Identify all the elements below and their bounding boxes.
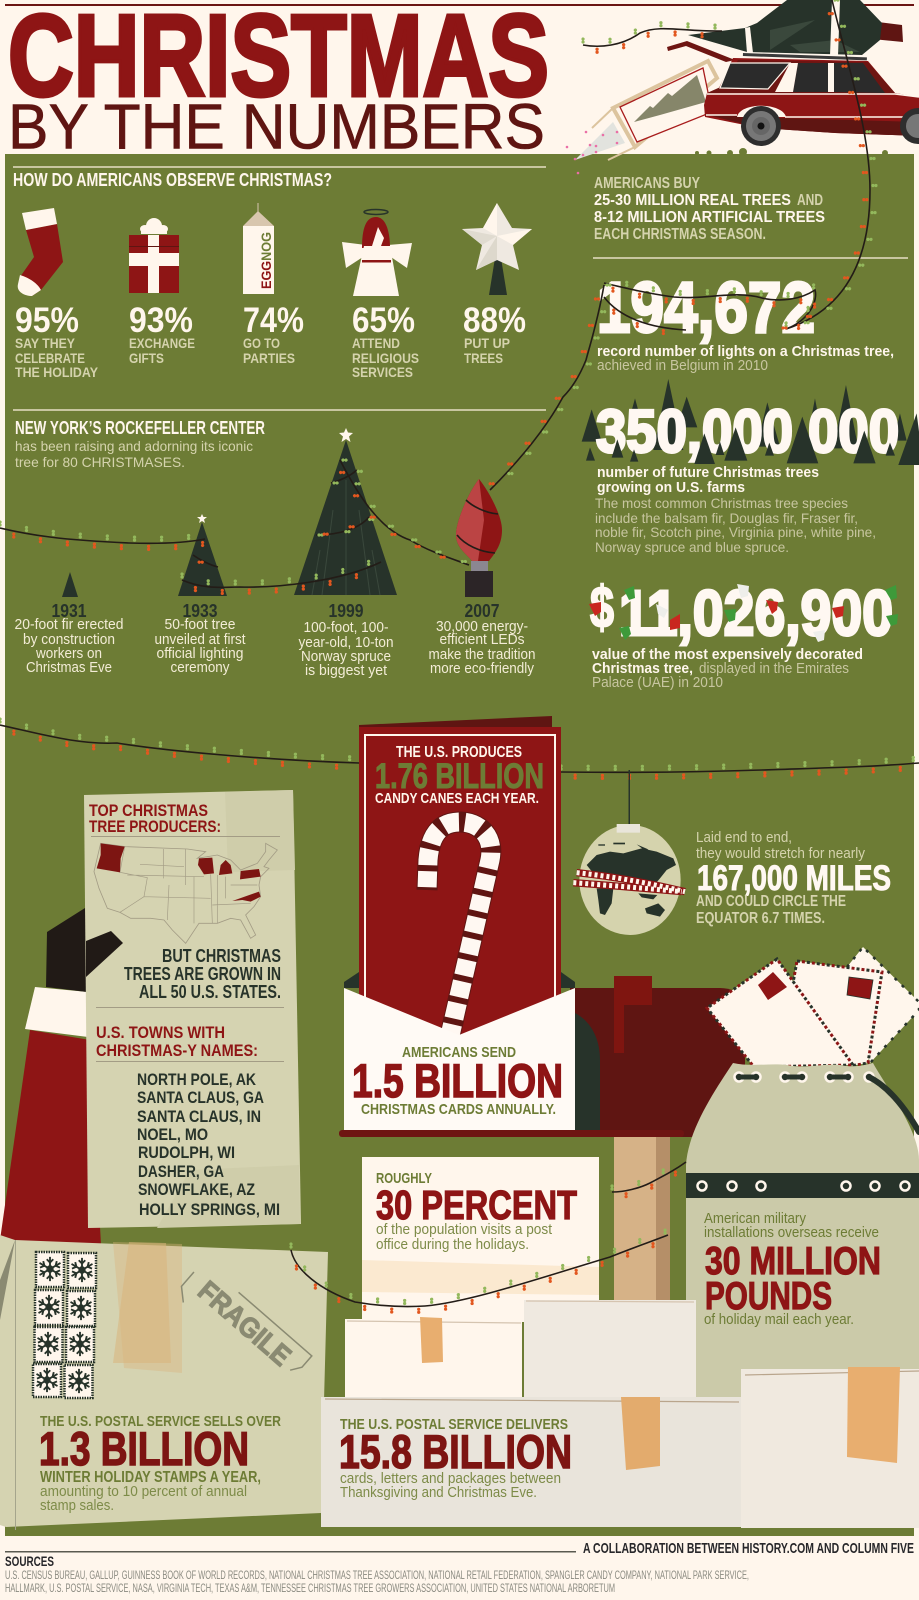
icon: eggnog carton (243, 203, 274, 294)
belt (686, 1173, 919, 1198)
tape (113, 1242, 182, 1373)
timeline: 1931: workers on (35, 646, 102, 662)
envelope (344, 988, 575, 1130)
stat: 93%: 93% (129, 301, 193, 340)
stat: future trees: include the balsam fir, Douglas fir, Fraser fir, (595, 510, 858, 526)
timeline: 1999: Norway spruce (301, 649, 391, 665)
text: candy canes stretch: EQUATOR 6.7 TIMES. (696, 910, 825, 927)
stat: 88%: PUT UP (464, 335, 510, 351)
stat: future trees: noble fir, Scotch pine, Virginia pine, white pine, (595, 524, 876, 540)
icon: eggnog carton: EGGNOG (258, 232, 274, 289)
envelope: 1.5 BILLION (352, 1054, 563, 1107)
timeline: 1931: 20-foot fir erected (14, 617, 124, 633)
icon: mailbox and post (339, 976, 745, 1305)
gems (589, 584, 898, 642)
icon: star tree topper (462, 203, 532, 295)
list: towns (137, 1070, 280, 1219)
section: Rockefeller Center: tree for 80 CHRISTMASES. (15, 454, 185, 470)
icon: car (704, 53, 919, 146)
icon: mail sack: POUNDS (705, 1275, 832, 1318)
stat: future trees (595, 398, 919, 555)
list: towns: HOLLY SPRINGS, MI (139, 1200, 280, 1219)
timeline: 2007 (428, 601, 536, 677)
small box (345, 1317, 522, 1399)
boxes stack (321, 1300, 919, 1528)
footer (5, 1540, 914, 1595)
icon: candy cane (427, 822, 491, 1040)
card: candy canes (344, 716, 575, 1040)
panel: 30 percent: of the population visits a post (376, 1222, 552, 1238)
panel: 30 percent: ROUGHLY (376, 1170, 432, 1187)
string lights: upper (0, 0, 919, 778)
stat: decorated tree value: Palace (UAE) in 2010 (592, 675, 723, 691)
pink sparkles (566, 131, 618, 174)
timeline: 1931: 1931 (52, 601, 86, 621)
timeline: 1999: 100-foot, 100- (304, 620, 389, 636)
icon: 1931 tree (62, 572, 78, 597)
illustration: Santa arm (0, 908, 123, 1245)
timeline: 1933: official lighting (156, 646, 244, 662)
big box: Thanksgiving and Christmas Eve. (340, 1485, 537, 1501)
panel: 30 percent (362, 1157, 599, 1322)
timeline: 1999: year-old, 10-ton (298, 635, 394, 651)
text: candy canes stretch (696, 830, 891, 927)
grass (695, 148, 888, 156)
stamp: fragile: FRAGILE (192, 1275, 297, 1372)
text: candy canes stretch: Laid end to end, (696, 830, 792, 846)
stat: 74%: 74% (243, 301, 304, 340)
heading: HOW DO AMERICANS OBSERVE CHRISTMAS? (13, 170, 332, 190)
icon: open box (592, 61, 717, 160)
stat: record lights: achieved in Belgium in 2010 (597, 358, 768, 374)
icon: trunk lid (667, 41, 735, 62)
stat: future trees: growing on U.S. farms (597, 480, 745, 496)
big box: cards, letters and packages between (340, 1471, 561, 1487)
string lights: lower (291, 1156, 686, 1313)
text: all 50 states: BUT CHRISTMAS (162, 946, 281, 966)
timeline: 1931: Christmas Eve (26, 660, 112, 676)
title (8, 0, 549, 162)
stat: 74% (243, 301, 304, 366)
timeline: 2007: more eco-friendly (430, 661, 535, 677)
stat: 65%: ATTEND (352, 335, 400, 351)
box: stamps and fragile: WINTER HOLIDAY STAMPS A YEAR, (40, 1469, 261, 1486)
list: towns: DASHER, GA (138, 1162, 224, 1181)
panel: paper list: CHRISTMAS-Y NAMES: (96, 1041, 258, 1060)
text: deliveries: THE U.S. POSTAL SERVICE DELIVERS (340, 1416, 568, 1433)
box: stamps and fragile: 1.3 BILLION (39, 1422, 249, 1475)
stat: 88%: TREES (464, 350, 503, 366)
icon: needle spill (575, 122, 625, 160)
stat: 95%: SAY THEY (15, 335, 76, 351)
stat: 65%: RELIGIOUS (352, 350, 419, 366)
stat: 88% (463, 301, 526, 366)
timeline: 1999: 1999 (328, 601, 364, 621)
list: towns: NOEL, MO (137, 1125, 208, 1144)
stat: future trees: number of future Christmas trees (597, 465, 819, 481)
stamps (33, 1252, 96, 1398)
icon: envelopes (707, 947, 919, 1067)
icon: tree on roof (688, 0, 903, 56)
icon: mail sack: of holiday mail each year. (704, 1312, 854, 1328)
envelope: CHRISTMAS CARDS ANNUALLY. (361, 1101, 556, 1118)
stat: future trees: The most common Christmas tree species (595, 495, 848, 511)
timeline: 1999 (298, 601, 394, 679)
card text: THE U.S. PRODUCES (396, 744, 522, 761)
stat: 93% (129, 301, 195, 366)
list: towns: NORTH POLE, AK (137, 1070, 257, 1089)
stat: record lights: record number of lights on a Christmas tree, (597, 344, 894, 360)
panel: paper list (84, 790, 301, 1228)
sack text: American military (704, 1211, 807, 1227)
icon: mail sack: 30 MILLION (705, 1240, 881, 1283)
text: trees bought: AMERICANS BUY (594, 175, 700, 192)
timeline: 1933: ceremony (170, 660, 230, 676)
timeline: 1933 (154, 601, 246, 676)
icon: ornament (573, 770, 685, 935)
icon: 1933 tree (178, 514, 227, 596)
text: all 50 states: TREES ARE GROWN IN (124, 964, 281, 984)
text: stamps: THE U.S. POSTAL SERVICE SELLS OVER (40, 1413, 281, 1430)
icon: gift (129, 218, 179, 293)
stat: 74%: PARTIES (243, 350, 295, 366)
stat: 95%: CELEBRATE (15, 350, 85, 366)
drawstring eyelets (734, 1072, 874, 1082)
stat: 88%: 88% (463, 301, 526, 340)
text: all 50 states: ALL 50 U.S. STATES. (139, 982, 281, 1002)
stat: future trees: Norway spruce and blue spruce. (595, 539, 789, 555)
timeline: 2007: make the tradition (428, 647, 536, 663)
section: Rockefeller Center (13, 409, 546, 679)
sources: SOURCES (5, 1553, 54, 1569)
list: towns: SANTA CLAUS, IN (137, 1107, 261, 1126)
text: trees bought (594, 175, 825, 243)
stat: record lights: 194,672 (597, 269, 815, 348)
text: trees bought: 8-12 MILLION ARTIFICIAL TREES (594, 209, 825, 226)
timeline: 2007: 30,000 energy- (436, 619, 528, 635)
card: candy canes: CANDY CANES EACH YEAR. (375, 790, 539, 807)
text: candy canes stretch: they would stretch for nearly (696, 846, 866, 862)
stat: 95% (15, 301, 99, 380)
text: candy canes stretch: AND COULD CIRCLE THE (696, 893, 846, 910)
panel: 30 percent: 30 PERCENT (376, 1182, 577, 1228)
list: towns: SANTA CLAUS, GA (137, 1088, 264, 1107)
box: stamps and fragile: stamp sales. (40, 1498, 114, 1514)
header top rule (5, 4, 914, 6)
timeline: 1933: unveiled at first (154, 632, 246, 648)
stat: 93%: EXCHANGE (129, 335, 195, 351)
right box (741, 1367, 919, 1528)
stat: 93%: GIFTS (129, 350, 164, 366)
envelope text: AMERICANS SEND (402, 1044, 516, 1061)
stat: record lights (597, 269, 894, 374)
stat: 95%: 95% (15, 301, 79, 340)
icon: tree farm (582, 379, 907, 461)
list: towns: SNOWFLAKE, AZ (138, 1180, 255, 1199)
stat: decorated tree value: value of the most expensively decorated (592, 647, 863, 663)
stat: decorated tree value: Christmas tree, (592, 661, 693, 677)
stat: 65%: SERVICES (352, 364, 413, 380)
text: all 50 states (124, 946, 281, 1002)
timeline: 2007: efficient LEDs (440, 632, 524, 648)
heading: towns: U.S. TOWNS WITH (96, 1023, 225, 1042)
panel: paper list: TREE PRODUCERS: (89, 817, 221, 836)
timeline: 1931: by construction (23, 632, 115, 648)
section: Rockefeller Center: has been raising and adorning its iconic (15, 438, 253, 454)
heading: TOP CHRISTMAS (89, 801, 208, 820)
icon: mail sack (686, 947, 919, 1400)
text: trees bought: EACH CHRISTMAS SEASON. (594, 226, 766, 243)
box: stamps and fragile: amounting to 10 percent of annual (40, 1484, 247, 1500)
illustration: station wagon with tree and box (566, 0, 919, 174)
heading: NEW YORK’S ROCKEFELLER CENTER (15, 418, 265, 438)
icon: 1999 tree (294, 428, 397, 595)
text: trees bought: 25-30 MILLION REAL TREES (594, 192, 791, 209)
card: candy canes: 1.76 BILLION (375, 757, 544, 796)
timeline: 2007: 2007 (464, 601, 500, 621)
box: stamps and fragile (0, 1235, 328, 1530)
title: BY THE NUMBERS (8, 90, 545, 162)
timeline: 1999: is biggest yet (305, 663, 387, 679)
stat: 74%: GO TO (243, 335, 280, 351)
stat: 95%: THE HOLIDAY (15, 364, 99, 380)
icon: mail sack: installations overseas receive (704, 1225, 879, 1241)
timeline: 1933: 50-foot tree (164, 617, 236, 633)
stat: decorated tree value (589, 575, 898, 691)
timeline: 1931 (14, 601, 124, 676)
panel: 30 percent: office during the holidays. (376, 1237, 529, 1253)
map: United States (94, 843, 277, 943)
icon: stocking (18, 208, 63, 296)
stat: decorated tree value: $ (590, 575, 614, 640)
text: trees bought: AND (797, 192, 823, 209)
list: towns: RUDOLPH, WI (138, 1143, 235, 1162)
stat: 65%: 65% (352, 301, 415, 340)
icon: LED bulb (456, 479, 502, 597)
stamp: fragile (174, 1261, 312, 1389)
timeline: 1933: 1933 (182, 601, 218, 621)
big box (321, 1397, 741, 1527)
small box 2 (524, 1300, 696, 1398)
big box: 15.8 BILLION (339, 1425, 572, 1478)
section: how do Americans observe Christmas (13, 166, 546, 380)
front trees (612, 413, 919, 465)
icon: angel (342, 210, 412, 296)
stat: 65% (352, 301, 419, 380)
icon: glove thumb (86, 931, 123, 977)
stat: decorated tree value: displayed in the Emirates (699, 661, 849, 677)
